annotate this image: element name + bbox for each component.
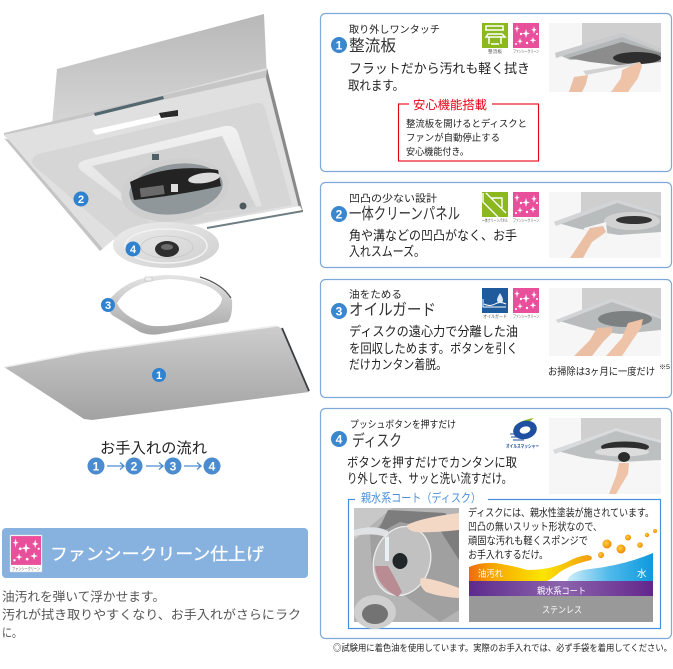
fancy clean description: に。 [2,626,22,640]
safety callout: 安心機能搭載 [413,98,487,112]
diagram: oil and water on the coating [469,529,657,622]
panel 3: oil guard [320,280,672,398]
panel 2 title: 一体クリーンパネル [349,205,460,223]
panel 4 subheading: プッシュボタンを押すだけ [350,418,456,431]
number badge 2 [74,192,88,206]
safety callout: ファンが自動停止する [406,132,500,144]
coat description: お手入れするだけ。 [468,548,548,561]
panel 1 body: 取れます。 [348,78,404,93]
icon: fancy clean [513,192,539,224]
baffle plate [4,326,309,420]
safety callout: 安心機能付き。 [406,146,469,158]
logo: oil smasher: オイルスマッシャー [506,443,539,450]
safety callout: 整流板を開けるとディスクと [406,118,527,130]
fancy clean banner [2,528,308,578]
icon: clean panel: 一体クリーンパネル [482,217,508,224]
panel 2: integrated clean panel [320,182,672,268]
care flow [88,440,220,474]
panel 1 body [348,61,530,93]
panel 1 body: フラットだから汚れも軽く拭き [349,61,530,76]
diagram: oil and water on the coating: 親水系コート [537,585,586,596]
hydrophilic coat box [348,490,660,629]
photo: wiping the panel [549,192,661,258]
icon: baffle: 整流板 [488,48,503,55]
panel 3 body: ディスクの遠心力で分離した油 [349,324,518,339]
panel 2 subheading: 凹凸の少ない設計 [349,192,437,205]
diagram: oil and water on the coating: ステンレス [542,605,582,615]
hood body frame [4,68,303,251]
panel 1 title: 整流板 [349,37,396,55]
badge 2 [331,206,347,222]
diagram: oil and water on the coating: 水 [637,568,647,580]
badge 2: 2 [336,208,343,222]
number badge 4: 4 [130,244,137,256]
panel 1 subheading: 取り外しワンタッチ [349,24,440,36]
number badge 2: 2 [78,194,84,206]
care flow heading: お手入れの流れ [100,440,207,457]
badge 1 [331,37,347,53]
fancy clean description: 汚れが拭き取りやすくなり、お手入れがさらにラク [2,607,301,622]
icon: clean panel [482,192,508,224]
number badge 3: 3 [105,300,111,312]
panel 3 subheading: 油をためる [349,288,402,301]
icon: oil guard [482,288,508,320]
panel 4 body [347,455,517,486]
fancy clean description: 油汚れを弾いて浮かせます。 [2,590,165,604]
hood chimney [52,14,267,125]
badge 1: 1 [336,38,343,52]
icon: oil guard: オイルガード [483,313,507,320]
icon: fancy clean [10,535,42,572]
panel 4 title: ディスク [352,431,402,450]
photo: washing the disc in a sink [354,508,459,629]
oil guard ring [107,275,232,335]
badge 3: 3 [336,304,343,318]
photo: removing the oil guard [549,288,661,356]
coat description: 頑固な汚れも軽くスポンジで [468,534,588,547]
panel 1: baffle plate [320,14,672,172]
badge 3 [331,303,347,319]
icon: fancy clean: ファンシークリーン [513,49,539,55]
number badge 1: 1 [156,370,162,382]
photo: opening the baffle [549,23,661,92]
badge 4: 4 [336,432,343,446]
number badge 3 [101,298,115,312]
panel 2 body: 角や溝などの凹凸がなく、お手 [349,228,517,243]
icon: baffle [482,23,508,55]
number badge 1 [152,368,166,382]
flow steps: 3 [170,460,177,474]
diagram: oil and water on the coating: 油汚れ [478,568,503,580]
flow steps: 2 [131,460,138,474]
panel 4 body: ボタンを押すだけでカンタンに取 [347,455,517,470]
photo: pushing the disc button [549,418,661,494]
fancy clean description [2,590,301,640]
icon: fancy clean [513,288,539,320]
number badge 4 [126,242,140,256]
panel 3 body: だけカンタン着脱。 [349,357,447,372]
illustration: exploded range hood [4,14,309,420]
cleaning frequency caption: お掃除は3ヶ月に一度だけ [548,365,655,378]
icon: fancy clean: ファンシークリーン [513,218,539,224]
flow steps [88,458,220,474]
flow steps: 1 [93,460,100,474]
icon: fancy clean: ファンシークリーン [513,314,539,320]
icon: fancy clean: ファンシークリーン [12,566,40,572]
flow steps: 4 [209,460,216,474]
panel 2 body: 入れスムーズ。 [349,244,425,259]
panel 4: disc [320,408,672,638]
badge 4 [331,431,347,447]
disc [113,222,219,268]
icon: fancy clean [513,23,539,55]
panel 2 body [349,228,517,259]
cleaning frequency caption: ※5 [659,364,670,371]
panel 3 body: を回収しためます。ボタンを引く [349,341,518,356]
panel 4 body: り外しでき、サッと洗い流すだけ。 [347,471,512,486]
logo: oil smasher [506,418,539,450]
panel 3 title: オイルガード [349,301,436,319]
inner panel [32,103,292,238]
coat description: 凹凸の無いスリット形状なので、 [468,520,602,533]
coat description [468,506,654,561]
banner title: ファンシークリーン仕上げ [50,545,264,564]
safety callout [398,98,538,161]
panel 3 body [349,324,518,372]
hydrophilic coat heading: 親水系コート（ディスク） [361,490,481,505]
fan opening [117,152,247,228]
